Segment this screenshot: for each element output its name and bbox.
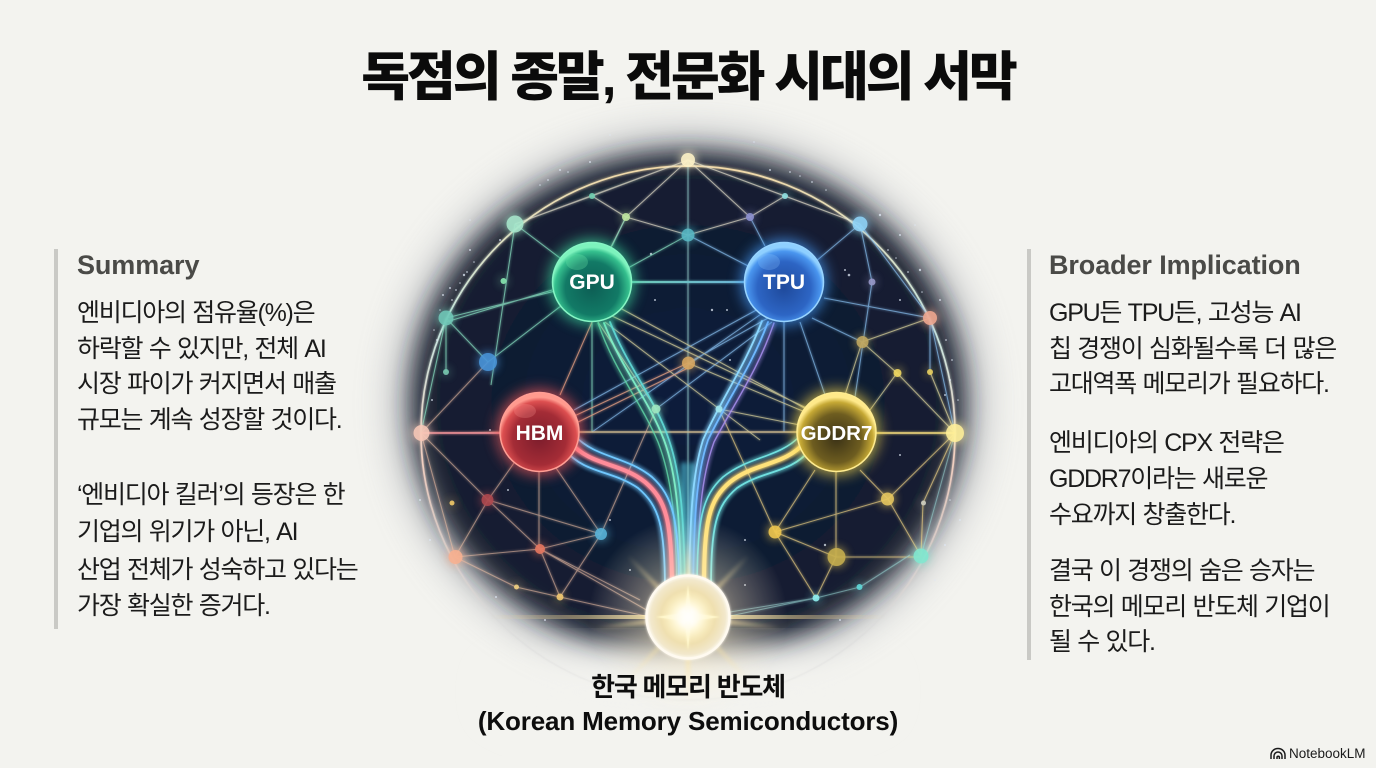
sphere background: [396, 136, 980, 732]
text: implication paragraph 2: GDDR7이라는 새로운: [1049, 465, 1267, 493]
text: implication paragraph 1: 고대역폭 메모리가 필요하다.: [1049, 370, 1329, 398]
stream: HBM: [565, 436, 679, 590]
text: summary paragraph 1: 규모는 계속 성장할 것이다.: [77, 406, 341, 434]
stream: central cyan bundle: [684, 465, 692, 590]
text: implication paragraph 3: 결국 이 경쟁의 숨은 승자는: [1049, 557, 1314, 585]
heading: Broader Implication: Broader Implication: [1049, 250, 1301, 280]
text: implication paragraph 3: 될 수 있다.: [1049, 628, 1155, 656]
core label: (Korean Memory Semiconductors): [478, 706, 898, 736]
heading: Summary: Summary: [77, 250, 199, 280]
node: GPU: [549, 239, 635, 325]
title: 독점의 종말, 전문화 시대의 서막: [361, 48, 1015, 107]
text: summary paragraph 1: 시장 파이가 커지면서 매출: [77, 370, 336, 398]
node: GDDR7: [794, 389, 880, 475]
node: HBM: HBM: [516, 422, 563, 445]
text: summary paragraph 1: 하락할 수 있지만, 전체 AI: [77, 335, 326, 363]
flowing streams into core: [565, 321, 810, 590]
text: summary paragraph 2: ‘엔비디아 킬러’의 등장은 한: [77, 481, 344, 509]
panel: Broader Implication: [1049, 250, 1336, 656]
core label: [478, 672, 898, 736]
node: HBM: [496, 389, 582, 475]
stream: GDDR7: [697, 436, 810, 590]
node: GDDR7: GDDR7: [801, 422, 872, 445]
text: implication paragraph 1: [1049, 299, 1336, 398]
text: implication paragraph 2: 엔비디아의 CPX 전략은: [1049, 429, 1284, 457]
outer ring: [421, 166, 955, 700]
connection lines: [421, 160, 955, 617]
stream: TPU: [689, 321, 774, 590]
text: summary paragraph 1: 엔비디아의 점유율(%)은: [77, 299, 314, 327]
text: implication paragraph 3: [1049, 557, 1330, 656]
text: implication paragraph 1: GPU든 TPU든, 고성능 AI: [1049, 299, 1301, 327]
icon: NotebookLM logo: [1270, 748, 1286, 759]
core label: 한국 메모리 반도체: [591, 672, 785, 702]
divider bar: summary: [54, 249, 58, 629]
scattered stars: [419, 134, 961, 621]
text: implication paragraph 3: 한국의 메모리 반도체 기업이: [1049, 593, 1330, 621]
node: TPU: [741, 239, 827, 325]
text: summary paragraph 2: [77, 481, 358, 620]
small glowing nodes: [414, 153, 964, 602]
text: implication paragraph 2: 수요까지 창출한다.: [1049, 501, 1235, 529]
divider bar: implication: [1027, 249, 1031, 660]
brand: NotebookLM: NotebookLM: [1289, 746, 1366, 761]
panel: Summary: [77, 250, 358, 620]
text: implication paragraph 1: 칩 경쟁이 심화될수록 더 많은: [1049, 335, 1336, 363]
text: implication paragraph 2: [1049, 429, 1284, 529]
text: summary paragraph 2: 가장 확실한 증거다.: [77, 592, 270, 620]
text: summary paragraph 1: [77, 299, 341, 434]
text: summary paragraph 2: 기업의 위기가 아닌, AI: [77, 518, 297, 546]
text: summary paragraph 2: 산업 전체가 성숙하고 있다는: [77, 556, 358, 584]
node: GPU: GPU: [569, 271, 615, 294]
stream: GPU: [598, 322, 685, 590]
node: TPU: TPU: [763, 271, 805, 294]
node: Korean memory core: [490, 517, 886, 717]
